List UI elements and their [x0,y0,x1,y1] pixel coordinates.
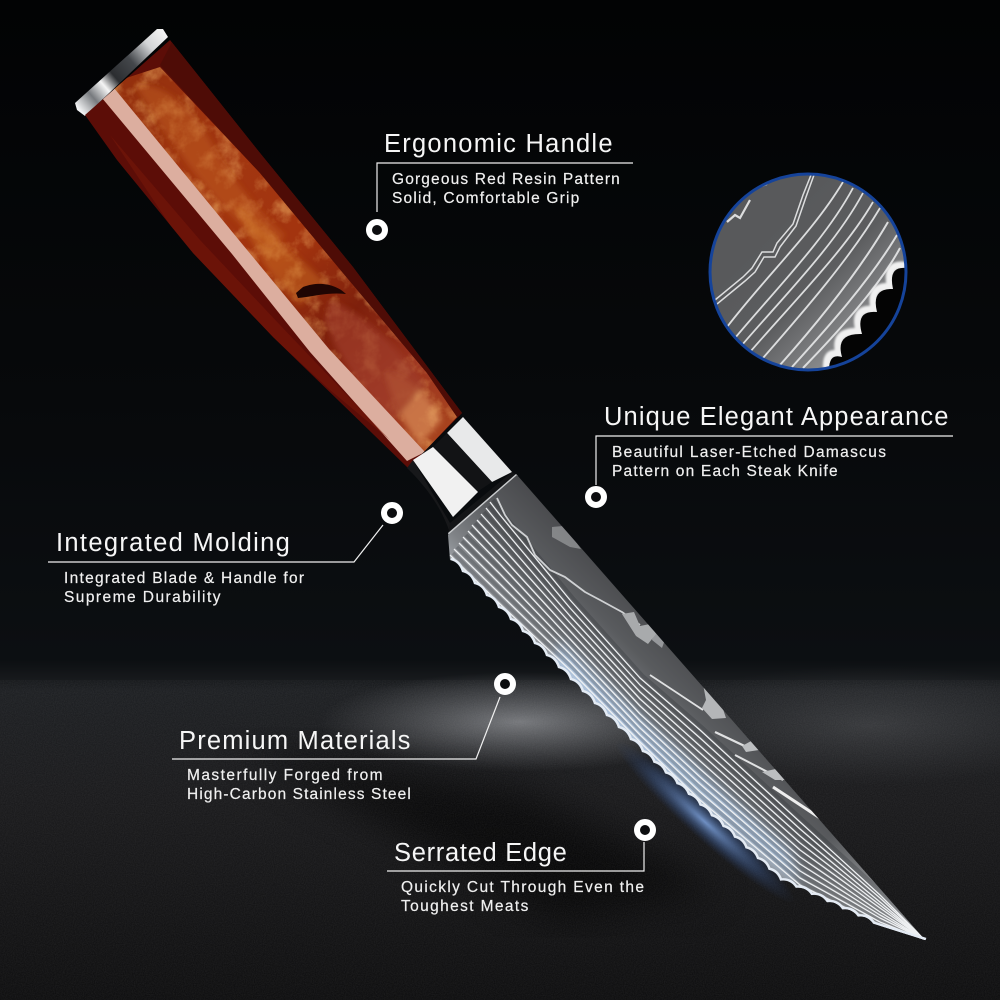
handle: main orange resin facet [113,67,457,453]
blue reflected light under serrated edge [604,729,806,915]
marker dots [369,222,653,838]
close-up: serrated teeth [827,265,906,368]
callout: serrated edge: Toughest Meats [401,898,530,915]
callout: premium materials: Masterfully Forged from [187,767,384,784]
callout: serrated edge: Quickly Cut Through Even the [401,879,645,896]
background: grey floor [0,660,1000,1000]
callout: serrated edge: Serrated Edge [394,839,568,867]
knife [75,29,926,940]
callout: unique elegant appearance: Unique Elegant Appearance [604,403,950,431]
callout: unique elegant appearance: Pattern on Each Steak Knife [612,463,839,480]
knife end cap [75,29,168,116]
leader lines [48,163,953,871]
callout: integrated molding: Integrated Blade & Handle for [64,570,305,587]
callout: premium materials: Premium Materials [179,727,412,755]
knife bolster [407,417,518,536]
close-up: etched wavy lines [715,175,900,368]
callout: serrated edge [394,839,645,915]
blade: cool blue sheen [550,640,800,885]
knife blade: damascus pattern [448,475,926,940]
callout: unique elegant appearance [604,403,950,480]
callout: integrated molding: Integrated Molding [56,529,291,557]
callout: premium materials [179,727,412,803]
callout: premium materials: High-Carbon Stainless Steel [187,786,412,803]
damascus close-up circle [708,172,908,372]
callout: unique elegant appearance: Beautiful Laser-Etched Damascus [612,444,887,461]
knife handle: red resin [85,40,462,468]
callout: ergonomic handle [384,130,621,207]
callout: integrated molding: Supreme Durability [64,589,222,606]
blade: lighter tip [814,842,922,939]
blade: etched lines and marks [497,498,823,820]
callout: integrated molding [56,529,305,606]
handle: dark crack in resin [296,284,346,298]
blade: serrated edge highlight [451,559,926,939]
handle: pale highlight stripe [102,88,425,461]
callout: ergonomic handle: Solid, Comfortable Grip [392,190,580,207]
callout: ergonomic handle: Ergonomic Handle [384,130,614,158]
callout: ergonomic handle: Gorgeous Red Resin Pattern [392,171,621,188]
